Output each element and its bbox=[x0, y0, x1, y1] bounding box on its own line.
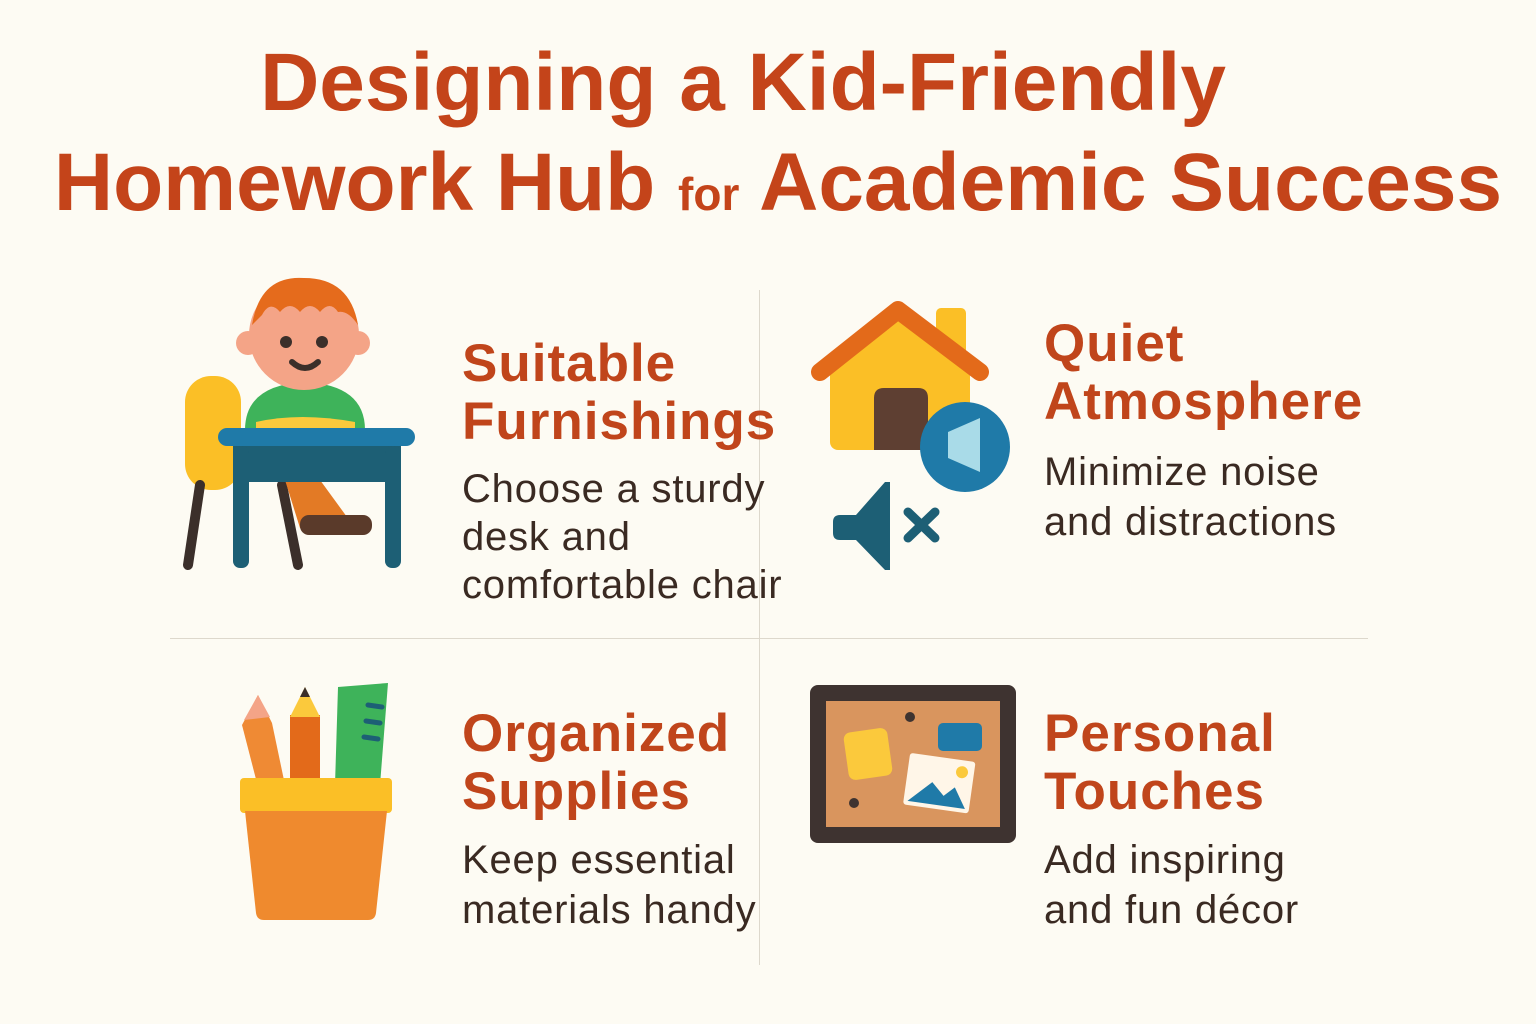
text: personal: and fun décor bbox=[1044, 888, 1299, 932]
heading: organized supplies: Supplies bbox=[462, 762, 691, 821]
text: furnishings bbox=[462, 467, 782, 607]
icon: house with mute bbox=[811, 301, 1010, 570]
text: supplies bbox=[462, 838, 756, 932]
heading: suitable furnishings: Furnishings bbox=[462, 392, 776, 451]
heading: quiet atmosphere: Atmosphere bbox=[1044, 372, 1363, 431]
heading: organized supplies bbox=[462, 704, 730, 821]
heading: quiet atmosphere: Quiet bbox=[1044, 314, 1184, 373]
text: furnishings: comfortable chair bbox=[462, 563, 782, 607]
heading: quiet atmosphere bbox=[1044, 314, 1363, 431]
text: furnishings: desk and bbox=[462, 515, 631, 559]
text: quiet: and distractions bbox=[1044, 500, 1337, 544]
heading: organized supplies: Organized bbox=[462, 704, 730, 763]
heading: personal touches: Personal bbox=[1044, 704, 1276, 763]
icon: corkboard bbox=[810, 685, 1016, 843]
text: personal bbox=[1044, 838, 1299, 932]
title: Homework Hub for Academic Success bbox=[54, 137, 1502, 228]
title: Designing a Kid-Friendly bbox=[260, 37, 1226, 128]
heading: suitable furnishings: Suitable bbox=[462, 334, 676, 393]
icon: kid at desk bbox=[183, 278, 415, 570]
heading: personal touches bbox=[1044, 704, 1276, 821]
heading: personal touches: Touches bbox=[1044, 762, 1265, 821]
text: furnishings: Choose a sturdy bbox=[462, 467, 765, 511]
heading: suitable furnishings bbox=[462, 334, 776, 451]
icon: pencil cup bbox=[240, 683, 392, 920]
text: supplies: Keep essential bbox=[462, 838, 736, 882]
text: quiet: Minimize noise bbox=[1044, 450, 1320, 494]
title bbox=[54, 37, 1502, 228]
text: personal: Add inspiring bbox=[1044, 838, 1286, 882]
text: supplies: materials handy bbox=[462, 888, 756, 932]
text: quiet bbox=[1044, 450, 1337, 544]
